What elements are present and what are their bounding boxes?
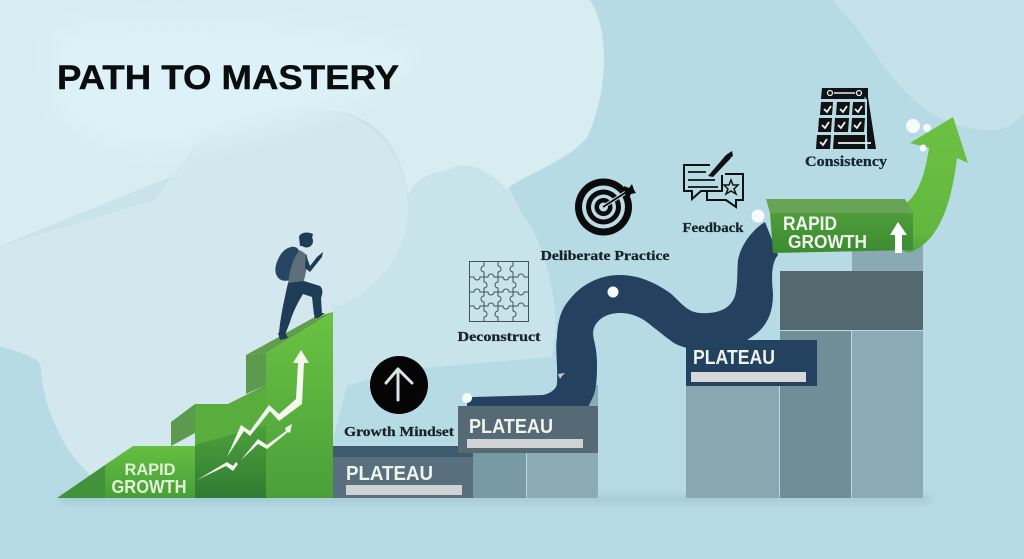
label: consistency: Consistency xyxy=(805,154,888,170)
plateau 2 xyxy=(458,406,598,453)
rapid growth block: GROWTH xyxy=(788,232,867,252)
label: feedback: Feedback xyxy=(682,221,744,236)
columns under plateau 2 xyxy=(473,385,598,498)
label: deliberate practice: Deliberate Practice xyxy=(540,249,670,264)
green staircase: rapid growth xyxy=(57,312,333,498)
label: growth mindset: Growth Mindset xyxy=(344,425,454,440)
road: winding path xyxy=(467,222,778,407)
rapid growth label xyxy=(112,460,186,497)
icon: feedback xyxy=(684,151,743,207)
plateau 1 xyxy=(333,446,473,498)
rapid growth block: RAPID xyxy=(783,214,837,235)
icon: calendar xyxy=(816,88,876,149)
icon: growth arrows xyxy=(197,350,309,480)
label: deconstruct: Deconstruct xyxy=(458,330,541,345)
icon: growth mindset xyxy=(370,356,428,414)
floor shadow xyxy=(60,496,930,502)
rapid growth label: RAPID xyxy=(124,460,176,479)
icon: target xyxy=(575,178,636,236)
arrow: large green arrow xyxy=(905,117,968,252)
road chip xyxy=(558,373,565,379)
icon: white up arrow xyxy=(890,222,907,253)
columns: right tower xyxy=(686,245,923,498)
rapid growth label: GROWTH xyxy=(112,477,186,497)
plateau 3: PLATEAU xyxy=(693,346,775,369)
icon: puzzle xyxy=(469,261,529,322)
milestone dots xyxy=(462,119,931,403)
plateau 2: PLATEAU xyxy=(469,415,553,438)
plateau 1: PLATEAU xyxy=(346,462,433,485)
rapid growth block xyxy=(766,199,913,253)
title: PATH TO MASTERY xyxy=(57,59,399,97)
figure: hiker xyxy=(275,233,325,340)
plateau 3 xyxy=(686,340,817,386)
